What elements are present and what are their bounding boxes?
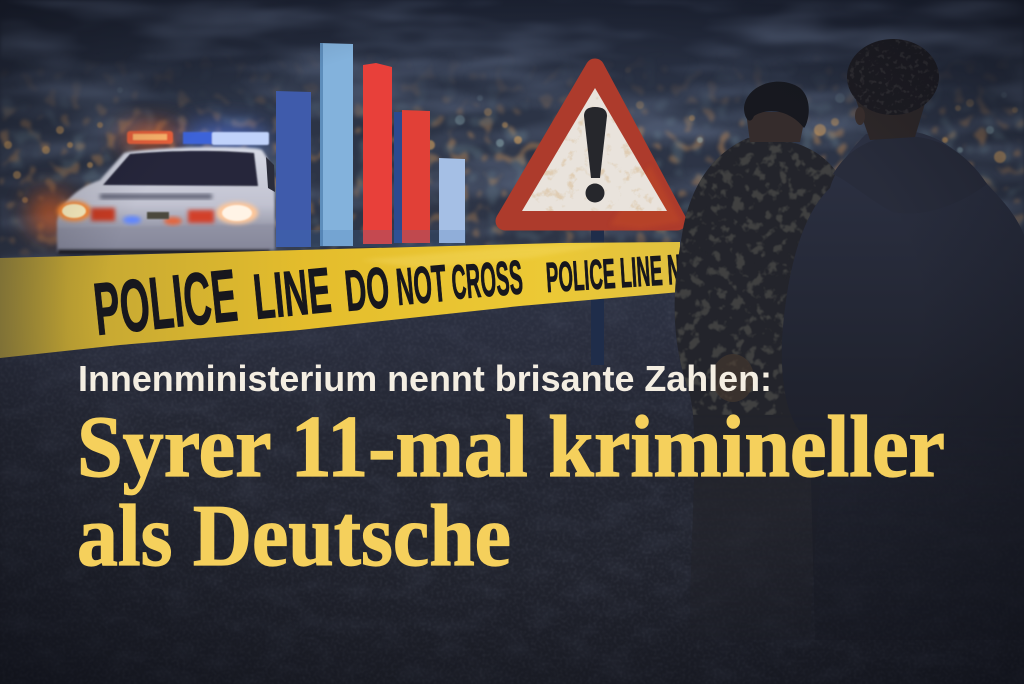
bar: red tall <box>363 63 392 244</box>
headline line 2: als Deutsche <box>77 488 511 585</box>
car glow <box>28 124 269 236</box>
sign red border <box>505 68 677 221</box>
sign white field <box>520 86 670 213</box>
city lights bokeh <box>0 67 1024 256</box>
camo hoodie body <box>674 138 835 580</box>
man in camouflage hoodie, seen from behind <box>674 82 835 580</box>
tape text: POLICE LINE DO NOT CROSS: CROSS <box>450 251 525 310</box>
headline <box>77 399 945 585</box>
sign dark patch <box>610 165 681 229</box>
neck and ear <box>856 100 926 140</box>
warning triangle sign <box>505 68 681 229</box>
police car <box>28 124 275 254</box>
car headlights <box>57 194 258 225</box>
side window <box>266 157 275 192</box>
car body <box>57 147 275 254</box>
tape text: POLICE LINE DO NOT CROSS: DO <box>342 255 392 324</box>
hood <box>833 138 986 183</box>
windshield <box>103 151 258 186</box>
man in dark hoodie, seen from behind <box>782 35 1024 640</box>
text: POLICE LINE N <box>545 246 682 301</box>
exclamation mark <box>584 107 607 202</box>
tape text: POLICE LINE DO NOT CROSS: POLICE <box>90 253 241 351</box>
tape text: POLICE LINE DO NOT CROSS <box>90 246 682 351</box>
bar: small dark blue <box>394 112 402 243</box>
bar: pale blue <box>439 158 465 243</box>
man 1 hand <box>716 354 753 402</box>
man 2 head <box>847 39 939 140</box>
tape band <box>0 242 680 358</box>
tape text: POLICE LINE DO NOT CROSS: LINE <box>250 254 334 333</box>
bar: dark blue <box>276 91 311 247</box>
light bar <box>127 131 269 145</box>
bar chart <box>276 43 466 247</box>
curly hair <box>847 39 939 115</box>
tape text: POLICE LINE DO NOT CROSS: NOT <box>394 255 449 317</box>
subtitle: Innenministerium nennt brisante Zahlen: <box>78 358 772 399</box>
headline line 1: Syrer 11-mal krimineller <box>77 399 945 496</box>
warning sign post <box>591 225 604 365</box>
man 1 head and hair <box>744 82 809 142</box>
dark hoodie body <box>782 132 1024 640</box>
bar: light blue tall <box>320 43 353 246</box>
bar: red <box>402 110 430 243</box>
police tape <box>0 242 682 358</box>
tape highlight <box>360 244 610 268</box>
